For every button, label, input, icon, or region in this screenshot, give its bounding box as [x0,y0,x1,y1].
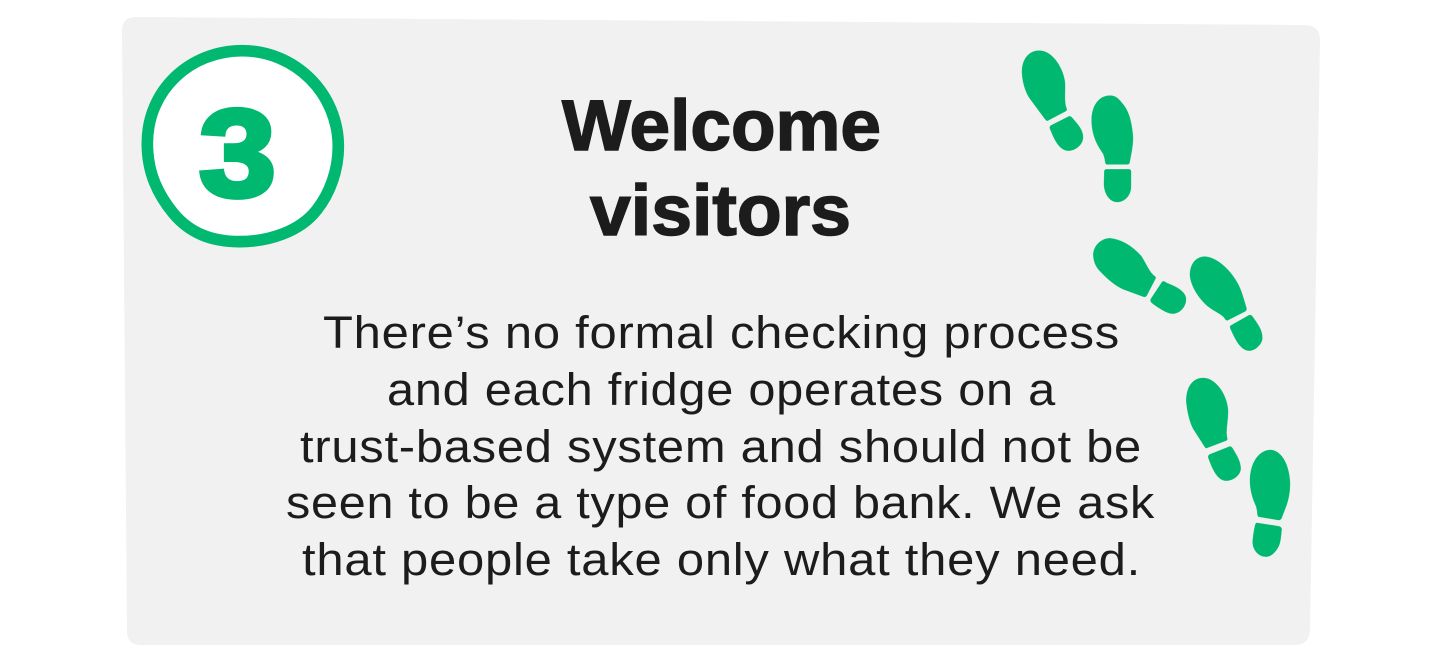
footprints lower pair [1186,378,1290,557]
icon: green footprints [1022,51,1290,557]
number badge [147,51,338,242]
body text: and each fridge operates on a [387,364,1056,415]
title: Welcome [562,87,881,166]
body text: that people take only what they need. [302,534,1141,585]
body text: trust-based system and should not be [300,421,1142,472]
title: visitors [590,172,851,251]
footprints upper pairs [1022,51,1262,351]
badge number: 3 [199,85,276,223]
body text: seen to be a type of food bank. We ask [286,477,1155,528]
body text [286,307,1155,585]
badge ring [147,51,338,242]
body text: There’s no formal checking process [323,307,1120,358]
panel: grey card background [122,17,1320,645]
title [562,87,881,251]
